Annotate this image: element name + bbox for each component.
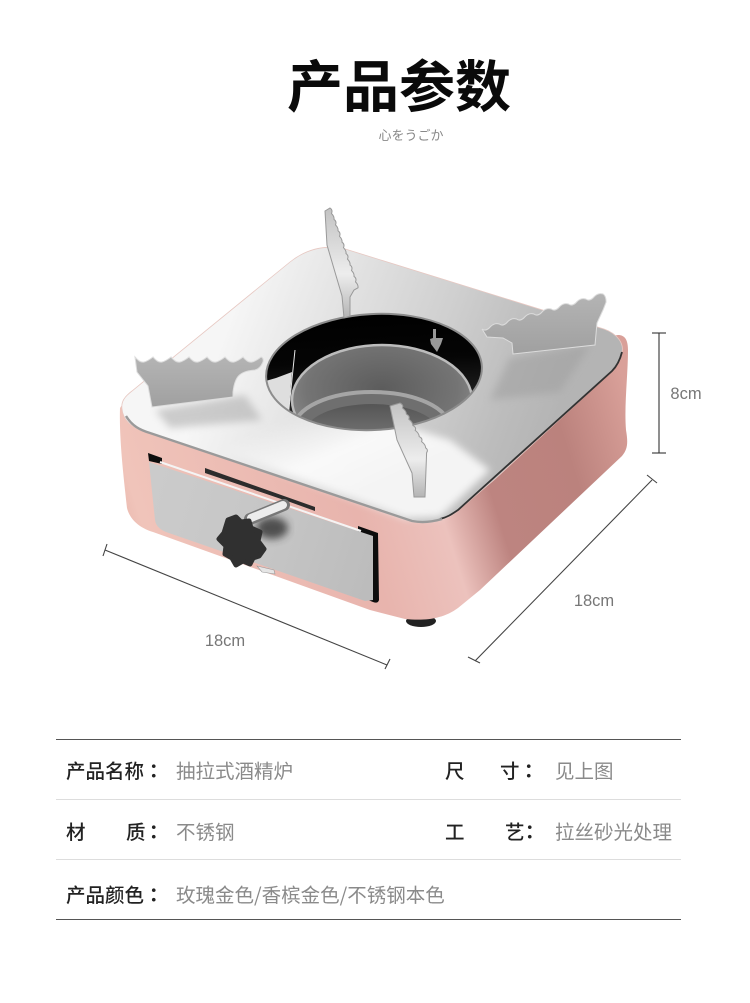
foot	[406, 615, 436, 627]
row: name and size: 抽拉式酒精炉	[176, 755, 293, 784]
pot base ring	[298, 390, 444, 420]
row: material and process: 不锈钢	[176, 816, 235, 845]
row: material and process: 材	[66, 822, 86, 844]
pot	[290, 344, 472, 414]
row: material and process: 拉丝砂光处理	[555, 816, 672, 845]
row: colours: ：	[144, 879, 164, 908]
row: name and size: 寸	[500, 761, 520, 783]
knob shadow	[256, 517, 288, 539]
product illustration: alcohol stove	[120, 208, 628, 627]
title: 产品参数	[287, 56, 511, 119]
row: name and size: ：	[144, 755, 164, 784]
spec table	[56, 740, 681, 920]
drawer lip	[160, 462, 361, 531]
plate brushed reflection	[155, 345, 590, 428]
knob	[219, 517, 264, 565]
support: top	[325, 208, 358, 318]
support: left	[135, 357, 263, 407]
stove body	[120, 335, 628, 620]
plate lower highlight	[135, 395, 490, 518]
row: name and size: 见上图	[555, 755, 614, 784]
row: name and size: 尺	[445, 761, 465, 783]
drawer slot	[148, 453, 379, 603]
subtitle: 心をうごか	[378, 128, 444, 143]
knob shaft	[250, 505, 284, 519]
dimension: left 18cm	[103, 544, 390, 669]
row: material and process: 质	[126, 822, 146, 844]
row: material and process: ：	[144, 816, 164, 845]
row: material and process: ：	[520, 816, 540, 845]
row: name and size: ：	[519, 755, 539, 784]
row: colours: 产品颜色	[66, 885, 144, 907]
screw	[430, 329, 443, 352]
row: name and size	[66, 755, 614, 784]
burner opening	[265, 312, 483, 432]
dimension: height 8cm	[652, 333, 666, 453]
row: material and process: 艺	[505, 822, 525, 844]
left wall wedge	[267, 372, 292, 410]
plate rim	[440, 352, 622, 519]
drawer front	[149, 462, 373, 601]
label: 8cm: 8cm	[670, 385, 702, 403]
support: right	[482, 294, 606, 354]
label: right 18cm: 18cm	[574, 592, 614, 610]
row: material and process: 工	[445, 822, 465, 844]
row: name and size: 产品名称	[66, 761, 144, 783]
dimension: right 18cm	[468, 475, 657, 663]
drawer pin	[257, 566, 275, 574]
support: front	[390, 403, 427, 497]
stove plate	[122, 247, 622, 523]
row: material and process	[66, 816, 672, 845]
label: left 18cm: 18cm	[205, 632, 245, 650]
row: colours: 玫瑰金色/香槟金色/不锈钢本色	[176, 879, 445, 908]
